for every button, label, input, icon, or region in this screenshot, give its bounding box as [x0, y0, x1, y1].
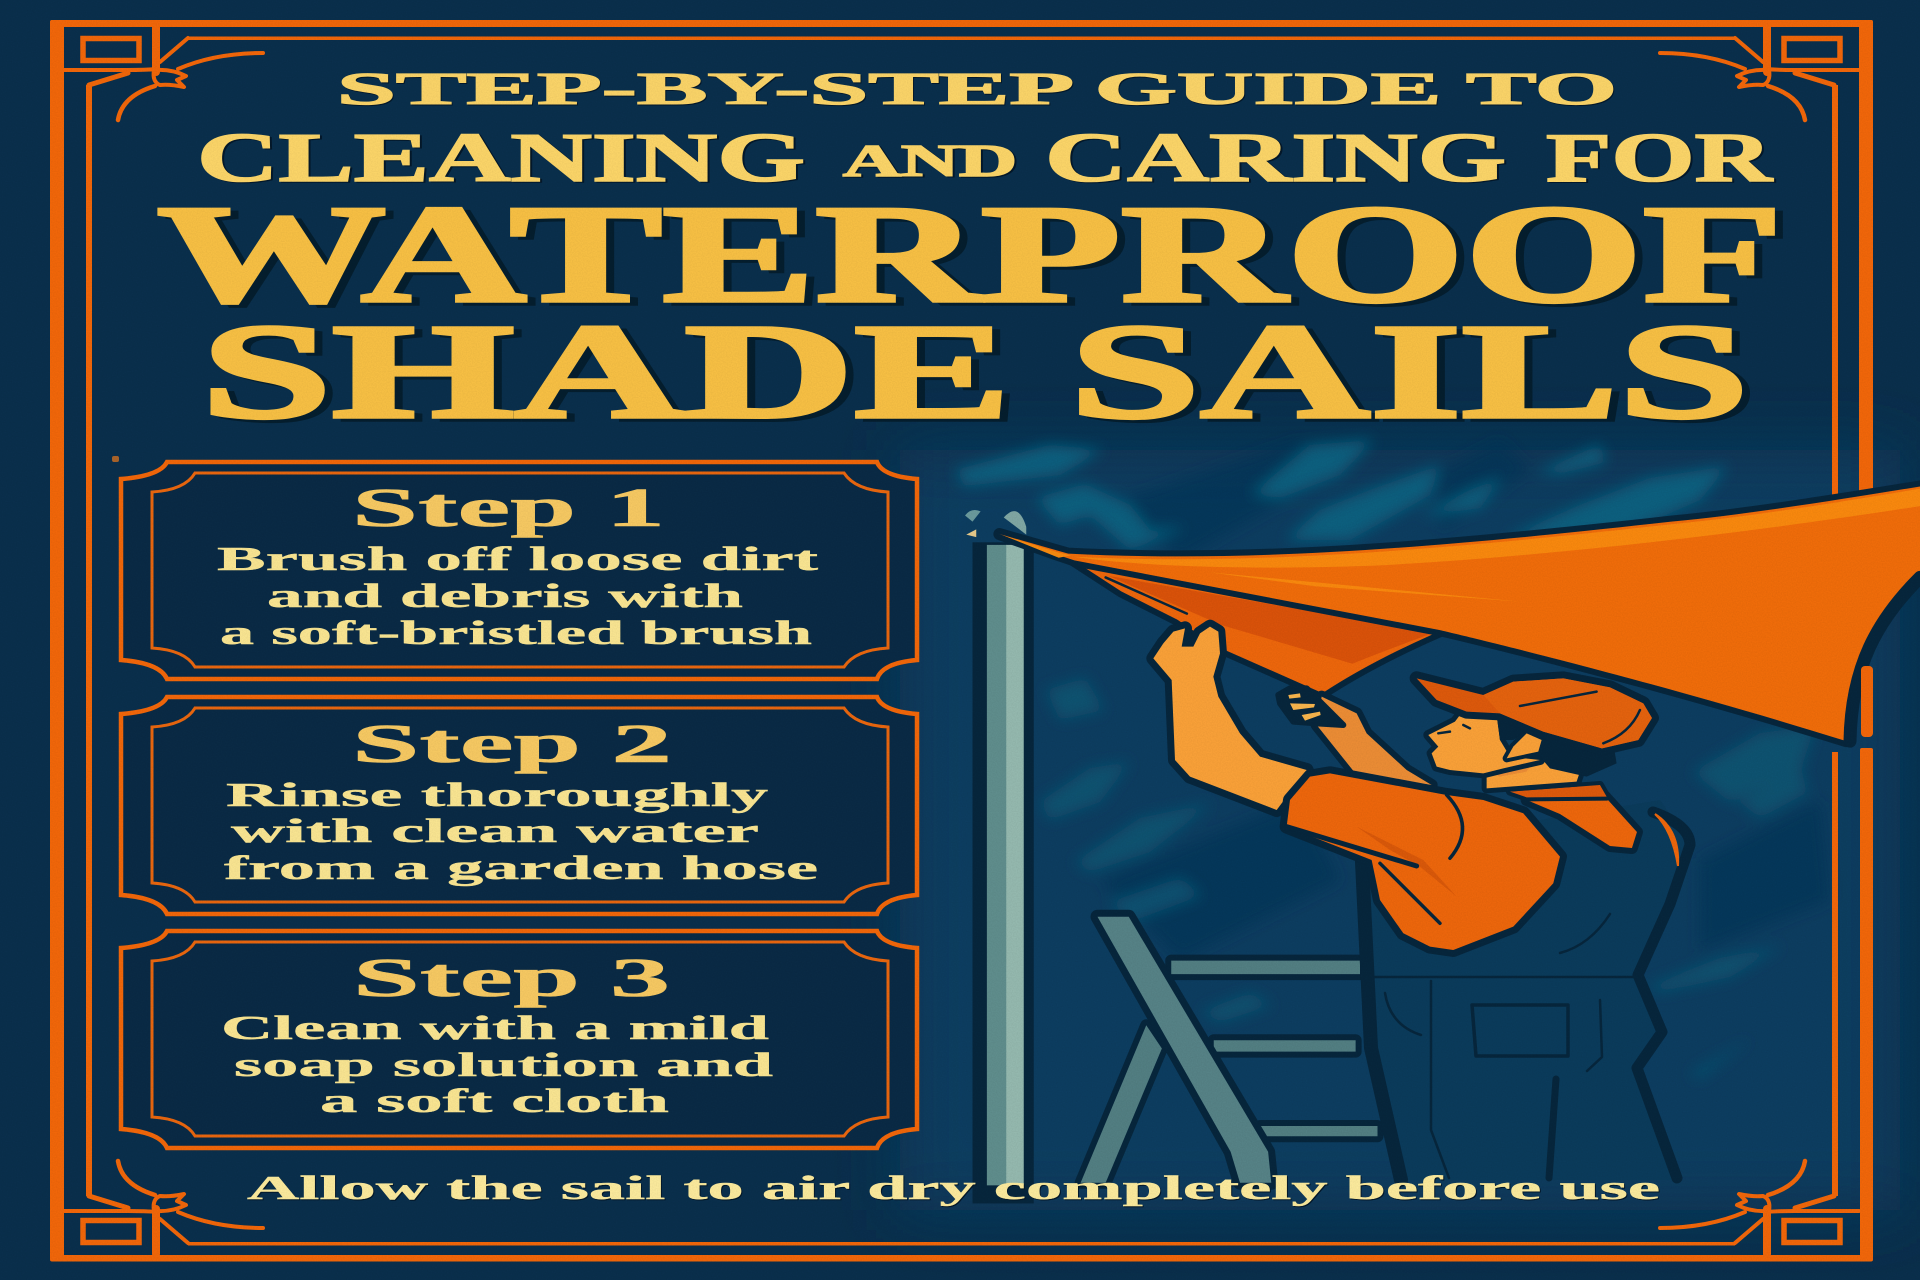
worker far arm: [1278, 688, 1432, 785]
text: step 3 body: a soft cloth: [320, 1083, 669, 1120]
title line 2: AND: [843, 136, 1017, 186]
title line 2: FOR: [1546, 120, 1774, 197]
text: step 2 body: [224, 777, 818, 887]
title line 3: WATERPROOF: [157, 177, 1783, 332]
sail: [999, 487, 1920, 741]
worker near arm and hand: [1153, 627, 1307, 810]
heading: step 1: Step 1: [352, 477, 665, 538]
worker shirt: [1287, 773, 1560, 950]
title: [157, 64, 1783, 447]
text: step 1 body: a soft-bristled brush: [220, 615, 812, 652]
corner ornament: bottom right: [1660, 1161, 1859, 1254]
frame segment beside sail tip: [1861, 666, 1873, 737]
corner ornament: top left: [64, 27, 263, 120]
speck: [112, 456, 119, 462]
title line 2: [197, 120, 1774, 197]
corner ornament: bottom left: [64, 1161, 263, 1254]
heading: step 2: Step 2: [352, 713, 672, 774]
title line 2: CLEANING: [197, 120, 805, 197]
title line 1: STEP-BY-STEP GUIDE TO: [337, 64, 1617, 114]
footer note: Allow the sail to air dry completely before use: [247, 1170, 1660, 1207]
title line 2: CARING: [1045, 120, 1506, 197]
text: step 3 body: Clean with a mild: [221, 1010, 769, 1047]
text: step 1 body: and debris with: [267, 578, 743, 615]
illustration: worker adjusting shade sail: [965, 487, 1920, 1203]
panel: step 1: [121, 462, 917, 679]
text: step 2 body: with clean water: [231, 813, 759, 850]
text: step 2 body: Rinse thoroughly: [226, 777, 768, 814]
worker figure details: [1153, 627, 1652, 950]
text: step 1 body: Brush off loose dirt: [217, 541, 819, 578]
text: step 3 body: [221, 1010, 773, 1120]
panel: step 3: [121, 931, 917, 1148]
text: step 1 body: [217, 541, 819, 652]
worker cap: [1417, 678, 1652, 748]
worker collar and back shoulder: [1510, 785, 1637, 848]
panel: step 2: [121, 697, 917, 914]
painted background strokes: [955, 440, 1830, 1078]
ladder: [1081, 917, 1378, 1183]
text: step 2 body: from a garden hose: [224, 850, 818, 887]
text: step 3 body: soap solution and: [234, 1047, 773, 1084]
worker overalls: [1360, 800, 1690, 1180]
pole: [965, 510, 1034, 1203]
worker neck and face: [1428, 715, 1617, 788]
heading: step 3: Step 3: [353, 947, 670, 1008]
corner ornament: top right: [1660, 27, 1859, 120]
title line 4: SHADE SAILS: [201, 297, 1749, 447]
